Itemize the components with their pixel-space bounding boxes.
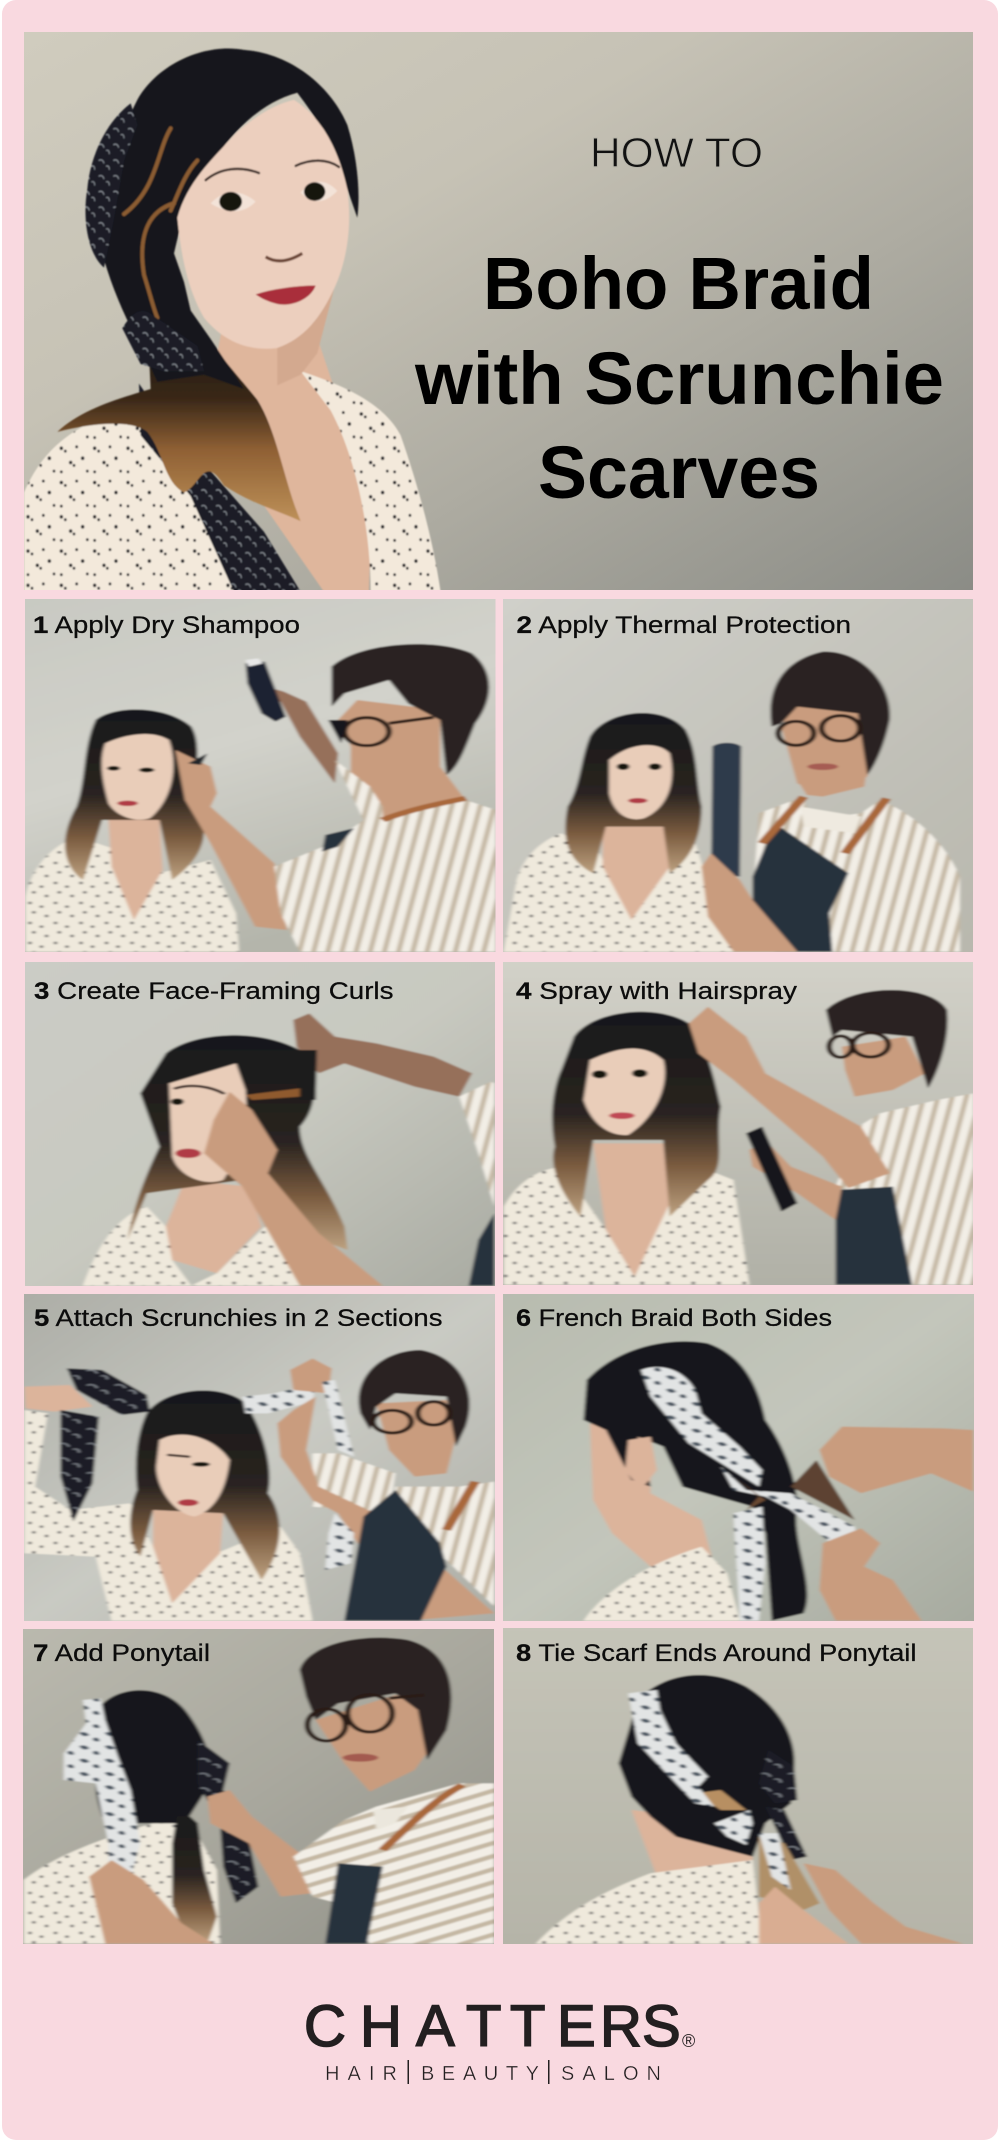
step 6 label: 6 French Braid Both Sides: [516, 1305, 832, 1332]
panel: step 5: [19, 1290, 504, 1623]
tagline: BEAUTY: [421, 2063, 539, 2085]
step 6 photo: [497, 1290, 982, 1623]
HOW TO heading: HOW TO: [590, 129, 763, 176]
panel: step 1: [19, 597, 504, 957]
main title: Boho Braid: [483, 242, 874, 325]
panel: step 4: [497, 960, 982, 1290]
panel: hero photo with title: [24, 32, 973, 592]
main title: [414, 242, 944, 514]
hero wall background: [24, 32, 973, 590]
main title: with Scrunchie: [414, 337, 944, 420]
step 3 photo: [19, 960, 504, 1290]
tagline: HAIR: [325, 2063, 397, 2085]
footer logo: [304, 1994, 695, 2085]
panel: step 3: [19, 960, 504, 1290]
panel: step 8: [497, 1623, 982, 1947]
step 5 label: 5 Attach Scrunchies in 2 Sections: [34, 1305, 442, 1332]
step 4 photo: [497, 960, 982, 1290]
step 7 photo: [19, 1627, 504, 1947]
tagline: [325, 2060, 661, 2085]
step 8 photo: [497, 1623, 982, 1947]
step 8 label: 8 Tie Scarf Ends Around Ponytail: [516, 1640, 916, 1667]
step 1 label: 1 Apply Dry Shampoo: [33, 612, 300, 639]
step 1 photo: [19, 597, 504, 957]
main title: Scarves: [538, 431, 820, 514]
step 2 label: 2 Apply Thermal Protection: [516, 612, 851, 639]
step 7 label: 7 Add Ponytail: [33, 1640, 210, 1667]
panel: step 6: [497, 1290, 982, 1623]
step 2 photo: [497, 597, 982, 957]
panel: step 7: [19, 1627, 504, 1947]
step 3 label: 3 Create Face-Framing Curls: [34, 978, 394, 1005]
panel: step 2: [497, 597, 982, 957]
hero portrait of woman: [24, 48, 441, 592]
tagline: SALON: [561, 2063, 661, 2085]
registered mark: ®: [682, 2031, 695, 2051]
step 4 label: 4 Spray with Hairspray: [516, 978, 797, 1005]
wordmark CHATTERS: CHATTERS: [304, 1994, 681, 2059]
step 5 photo: [19, 1290, 504, 1623]
